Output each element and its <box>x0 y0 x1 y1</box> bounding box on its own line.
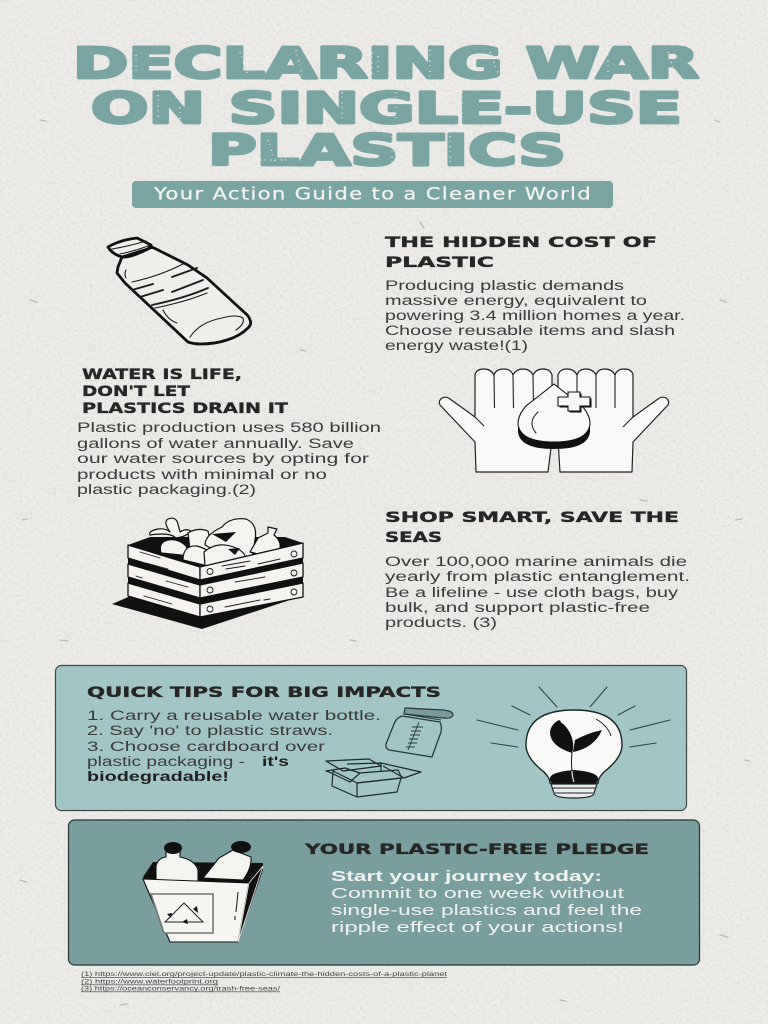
footnotes: sources <box>81 971 447 992</box>
icon: cardboard box <box>326 759 421 797</box>
title: ON SINGLE-USE <box>91 84 682 134</box>
text: tips list: 3. Choose cardboard over <box>87 739 326 754</box>
text: shop smart body: Be a lifeline - use cloth bags, buy <box>385 585 678 600</box>
icon: reusable bottle <box>386 708 453 757</box>
footnotes: sources: (2) https://www.waterfootprint.org <box>81 978 219 986</box>
text: hidden cost body: powering 3.4 million homes a year. <box>385 308 685 323</box>
text: shop smart body: bulk, and support plastic-free <box>385 600 650 615</box>
panel: plastic-free pledge <box>68 820 700 965</box>
section: the hidden cost of plastic <box>385 235 685 353</box>
text: shop smart body: Over 100,000 marine animals die <box>385 554 687 569</box>
footnotes: sources: (3) https://oceanconservancy.org/trash-free-seas/ <box>81 986 280 992</box>
text: water body: gallons of water annually. Save <box>77 436 354 451</box>
heading: quick tips: QUICK TIPS FOR BIG IMPACTS <box>87 685 441 701</box>
heading: shop smart <box>385 510 679 546</box>
subtitle banner: Your Action Guide to a Cleaner World <box>153 184 592 204</box>
heading: shop smart: SEAS <box>385 530 442 546</box>
text: shop smart body <box>385 554 690 630</box>
heading: hidden cost: PLASTIC <box>385 255 494 271</box>
title <box>73 39 699 176</box>
text: water body: plastic packaging.(2) <box>77 482 256 497</box>
footnotes: sources: (1) https://www.ciel.org/project-update/plastic-climate-the-hidden-costs-of-a-plastic-planet <box>81 971 447 978</box>
text: pledge body: Commit to one week without <box>331 885 625 902</box>
text: shop smart body: products. (3) <box>385 615 497 630</box>
text: tips list: 1. Carry a reusable water bottle. <box>87 708 381 723</box>
heading: shop smart: SHOP SMART, SAVE THE <box>385 510 679 526</box>
icon: light bulb with sprout <box>477 687 670 798</box>
icon: hands holding water drop <box>439 369 669 472</box>
heading: water is life <box>82 367 288 417</box>
heading: water is life: WATER IS LIFE, <box>82 367 242 383</box>
icon: plastic bottle <box>108 238 251 344</box>
text: tips list <box>87 708 381 784</box>
text: hidden cost body: massive energy, equivalent to <box>385 293 647 308</box>
text: water body: products with minimal or no <box>77 467 327 482</box>
subtitle banner <box>132 181 613 208</box>
icon: crate of produce <box>112 518 303 629</box>
title: DECLARING WAR <box>73 39 699 89</box>
section: shop smart <box>385 510 690 630</box>
text: hidden cost body: Producing plastic demands <box>385 278 624 293</box>
text: pledge body <box>331 868 642 936</box>
text: pledge body: ripple effect of your actions! <box>331 919 624 936</box>
text: pledge body: Start your journey today: <box>331 868 602 885</box>
panel: quick tips <box>56 666 686 810</box>
heading: water is life: DON'T LET <box>82 384 190 400</box>
heading: water is life: PLASTICS DRAIN IT <box>82 401 288 417</box>
text: water body <box>77 420 381 497</box>
heading: pledge: YOUR PLASTIC-FREE PLEDGE <box>304 842 649 858</box>
heading: hidden cost: THE HIDDEN COST OF <box>385 235 657 251</box>
text: hidden cost body <box>385 278 685 353</box>
text: hidden cost body: energy waste!(1) <box>385 338 528 353</box>
text: tips list: biodegradable! <box>87 769 229 784</box>
text: water body: Plastic production uses 580 billion <box>77 420 381 435</box>
text: tips list: plastic packaging - <box>87 754 245 769</box>
heading: hidden cost <box>385 235 657 271</box>
text: hidden cost body: Choose reusable items and slash <box>385 323 675 338</box>
title: PLASTICS <box>208 126 566 176</box>
text: water body: our water sources by opting for <box>77 451 370 466</box>
text: tips list: 2. Say 'no' to plastic straws. <box>87 723 333 738</box>
text: tips list: it's <box>262 754 289 769</box>
text: pledge body: single-use plastics and feel the <box>331 902 642 919</box>
section: water is life <box>77 367 381 497</box>
text: shop smart body: yearly from plastic entanglement. <box>385 569 690 584</box>
icon: recycling bin with bottles <box>143 841 263 942</box>
